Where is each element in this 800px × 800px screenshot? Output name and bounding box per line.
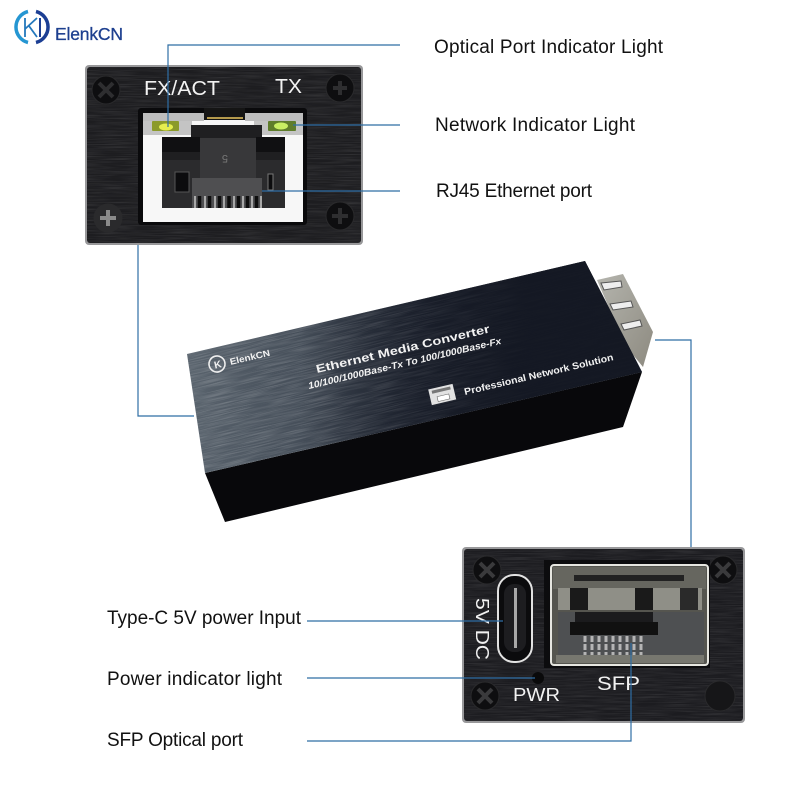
label: Type-C: Type-C 5V power Input bbox=[107, 608, 302, 629]
printed labels: FX/ACT bbox=[144, 78, 220, 100]
panel: SFP and power front view bbox=[462, 547, 745, 723]
USB-C port bbox=[498, 575, 532, 662]
power LED bbox=[532, 672, 544, 684]
device: media converter bbox=[187, 261, 653, 522]
RJ45 port bbox=[138, 108, 307, 225]
LED: optical bbox=[152, 121, 179, 131]
front face bbox=[205, 372, 642, 522]
connector: front panel to device bbox=[138, 245, 194, 416]
panel: SFP and power front view: SFP bbox=[597, 674, 640, 695]
device subtitle: 10/100/1000Base-Tx To 100/1000Base-Fx bbox=[307, 336, 503, 392]
label: network indicator: Network Indicator Light bbox=[435, 115, 636, 136]
device tagline: Professional Network Solution bbox=[463, 352, 615, 398]
icon: ElenkCN logo bbox=[16, 12, 48, 42]
connector: device to rear panel bbox=[655, 340, 691, 547]
label: optical port indicator: Optical Port Indicator Light bbox=[434, 37, 664, 58]
SFP cage bbox=[544, 560, 710, 668]
callout line: Type-C bbox=[307, 620, 503, 622]
SFP cage end bbox=[597, 274, 653, 367]
device title: Ethernet Media Converter bbox=[315, 323, 492, 376]
screws bbox=[92, 74, 354, 232]
jack interior bbox=[162, 125, 285, 208]
panel: RJ45 front view bbox=[85, 65, 363, 245]
device branding: ElenkCN bbox=[229, 348, 271, 367]
callout line: optical port bbox=[168, 45, 400, 127]
callout line: power bbox=[307, 677, 535, 679]
callout line: network bbox=[293, 124, 400, 126]
top face bbox=[187, 261, 642, 473]
printed label: 5V DC: 5V DC bbox=[472, 598, 492, 660]
panel: RJ45 front view: TX bbox=[275, 76, 302, 98]
screws bbox=[471, 556, 737, 711]
label: RJ45: RJ45 Ethernet port bbox=[436, 181, 593, 202]
label: SFP: SFP Optical port bbox=[107, 730, 244, 751]
label: power indicator: Power indicator light bbox=[107, 669, 283, 690]
callout line: SFP bbox=[307, 643, 631, 741]
LED: network bbox=[268, 121, 296, 131]
panel body bbox=[85, 65, 363, 245]
callout line: RJ45 bbox=[262, 190, 400, 192]
printed labels: PWR bbox=[513, 685, 560, 705]
logo bbox=[16, 12, 123, 44]
device branding bbox=[207, 344, 271, 374]
panel body bbox=[462, 547, 745, 723]
RJ45 port: 5 bbox=[222, 152, 228, 164]
icon: RJ45 bbox=[428, 384, 456, 405]
device branding: K bbox=[213, 359, 223, 372]
logo wordmark: ElenkCN bbox=[55, 24, 123, 44]
